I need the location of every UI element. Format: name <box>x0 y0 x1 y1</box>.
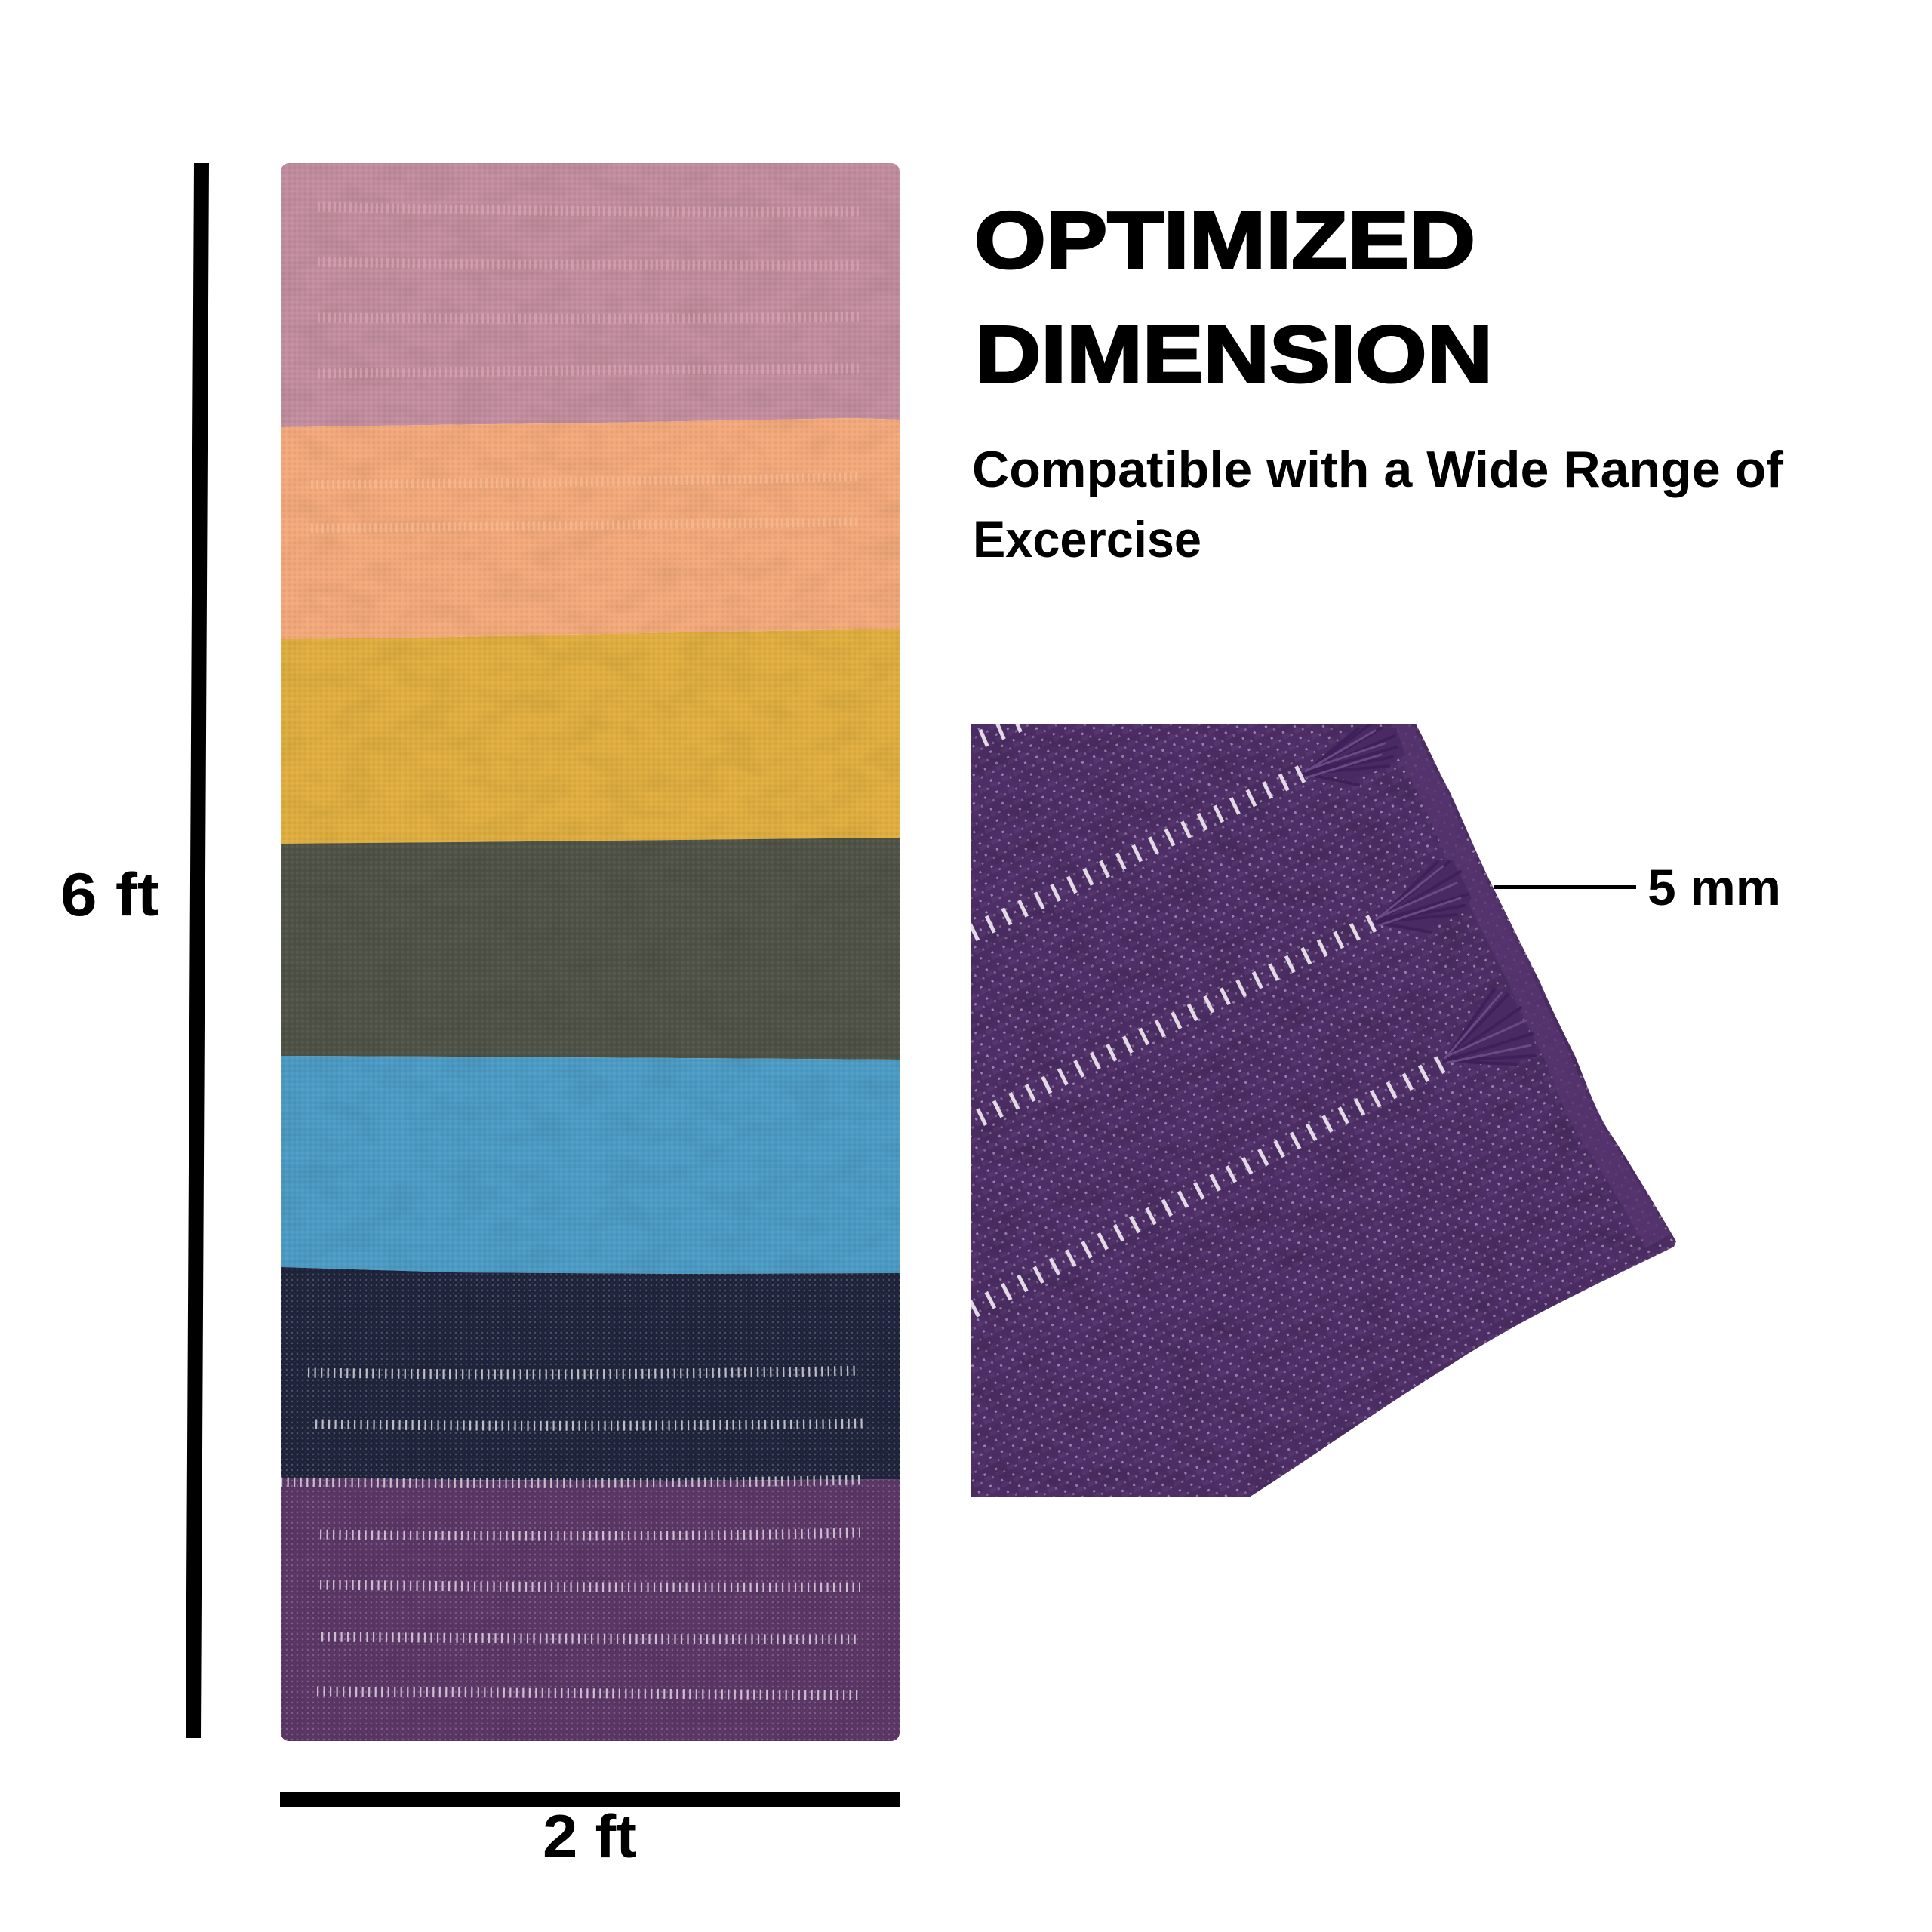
stitched lines: navy stripe <box>281 1371 864 1483</box>
stripe: mustard <box>281 629 900 844</box>
stitched lines: plum stripe <box>317 1533 860 1695</box>
stripe: pink <box>281 163 900 427</box>
thickness label: 5 mm: 5 mm <box>1647 860 1781 916</box>
stitched lines: peach stripe <box>311 477 860 528</box>
close-up photo of mat corner <box>971 723 1681 1497</box>
stripe: navy <box>281 1267 900 1481</box>
heading: DIMENSION <box>975 309 1493 399</box>
fabric texture <box>971 724 1681 1497</box>
heading <box>974 195 1493 399</box>
stitched lines: pink stripe <box>318 207 860 374</box>
hem along edge <box>1396 724 1658 1241</box>
subheading <box>972 441 1783 568</box>
subheading: Compatible with a Wide Range of <box>972 441 1783 498</box>
stripe: sky blue <box>281 1056 900 1274</box>
stripe: olive grey <box>281 838 900 1060</box>
yoga mat with colour stripes <box>281 163 900 1741</box>
stripe: peach <box>281 418 900 639</box>
stripe: plum <box>281 1478 900 1741</box>
infographic canvas <box>63 163 1784 1858</box>
height label: 6 ft: 6 ft <box>60 861 159 929</box>
width label: 2 ft: 2 ft <box>543 1803 637 1871</box>
vertical dimension bar <box>186 163 209 1738</box>
horizontal dimension bar <box>280 1792 900 1807</box>
stitched lines <box>971 723 1441 1310</box>
fabric base <box>971 724 1681 1497</box>
tassels <box>1304 724 1536 1066</box>
leader line to thickness <box>1494 885 1636 889</box>
heading: OPTIMIZED <box>974 195 1475 285</box>
subheading: Excercise <box>973 511 1201 568</box>
woven texture overlays <box>281 163 900 1741</box>
